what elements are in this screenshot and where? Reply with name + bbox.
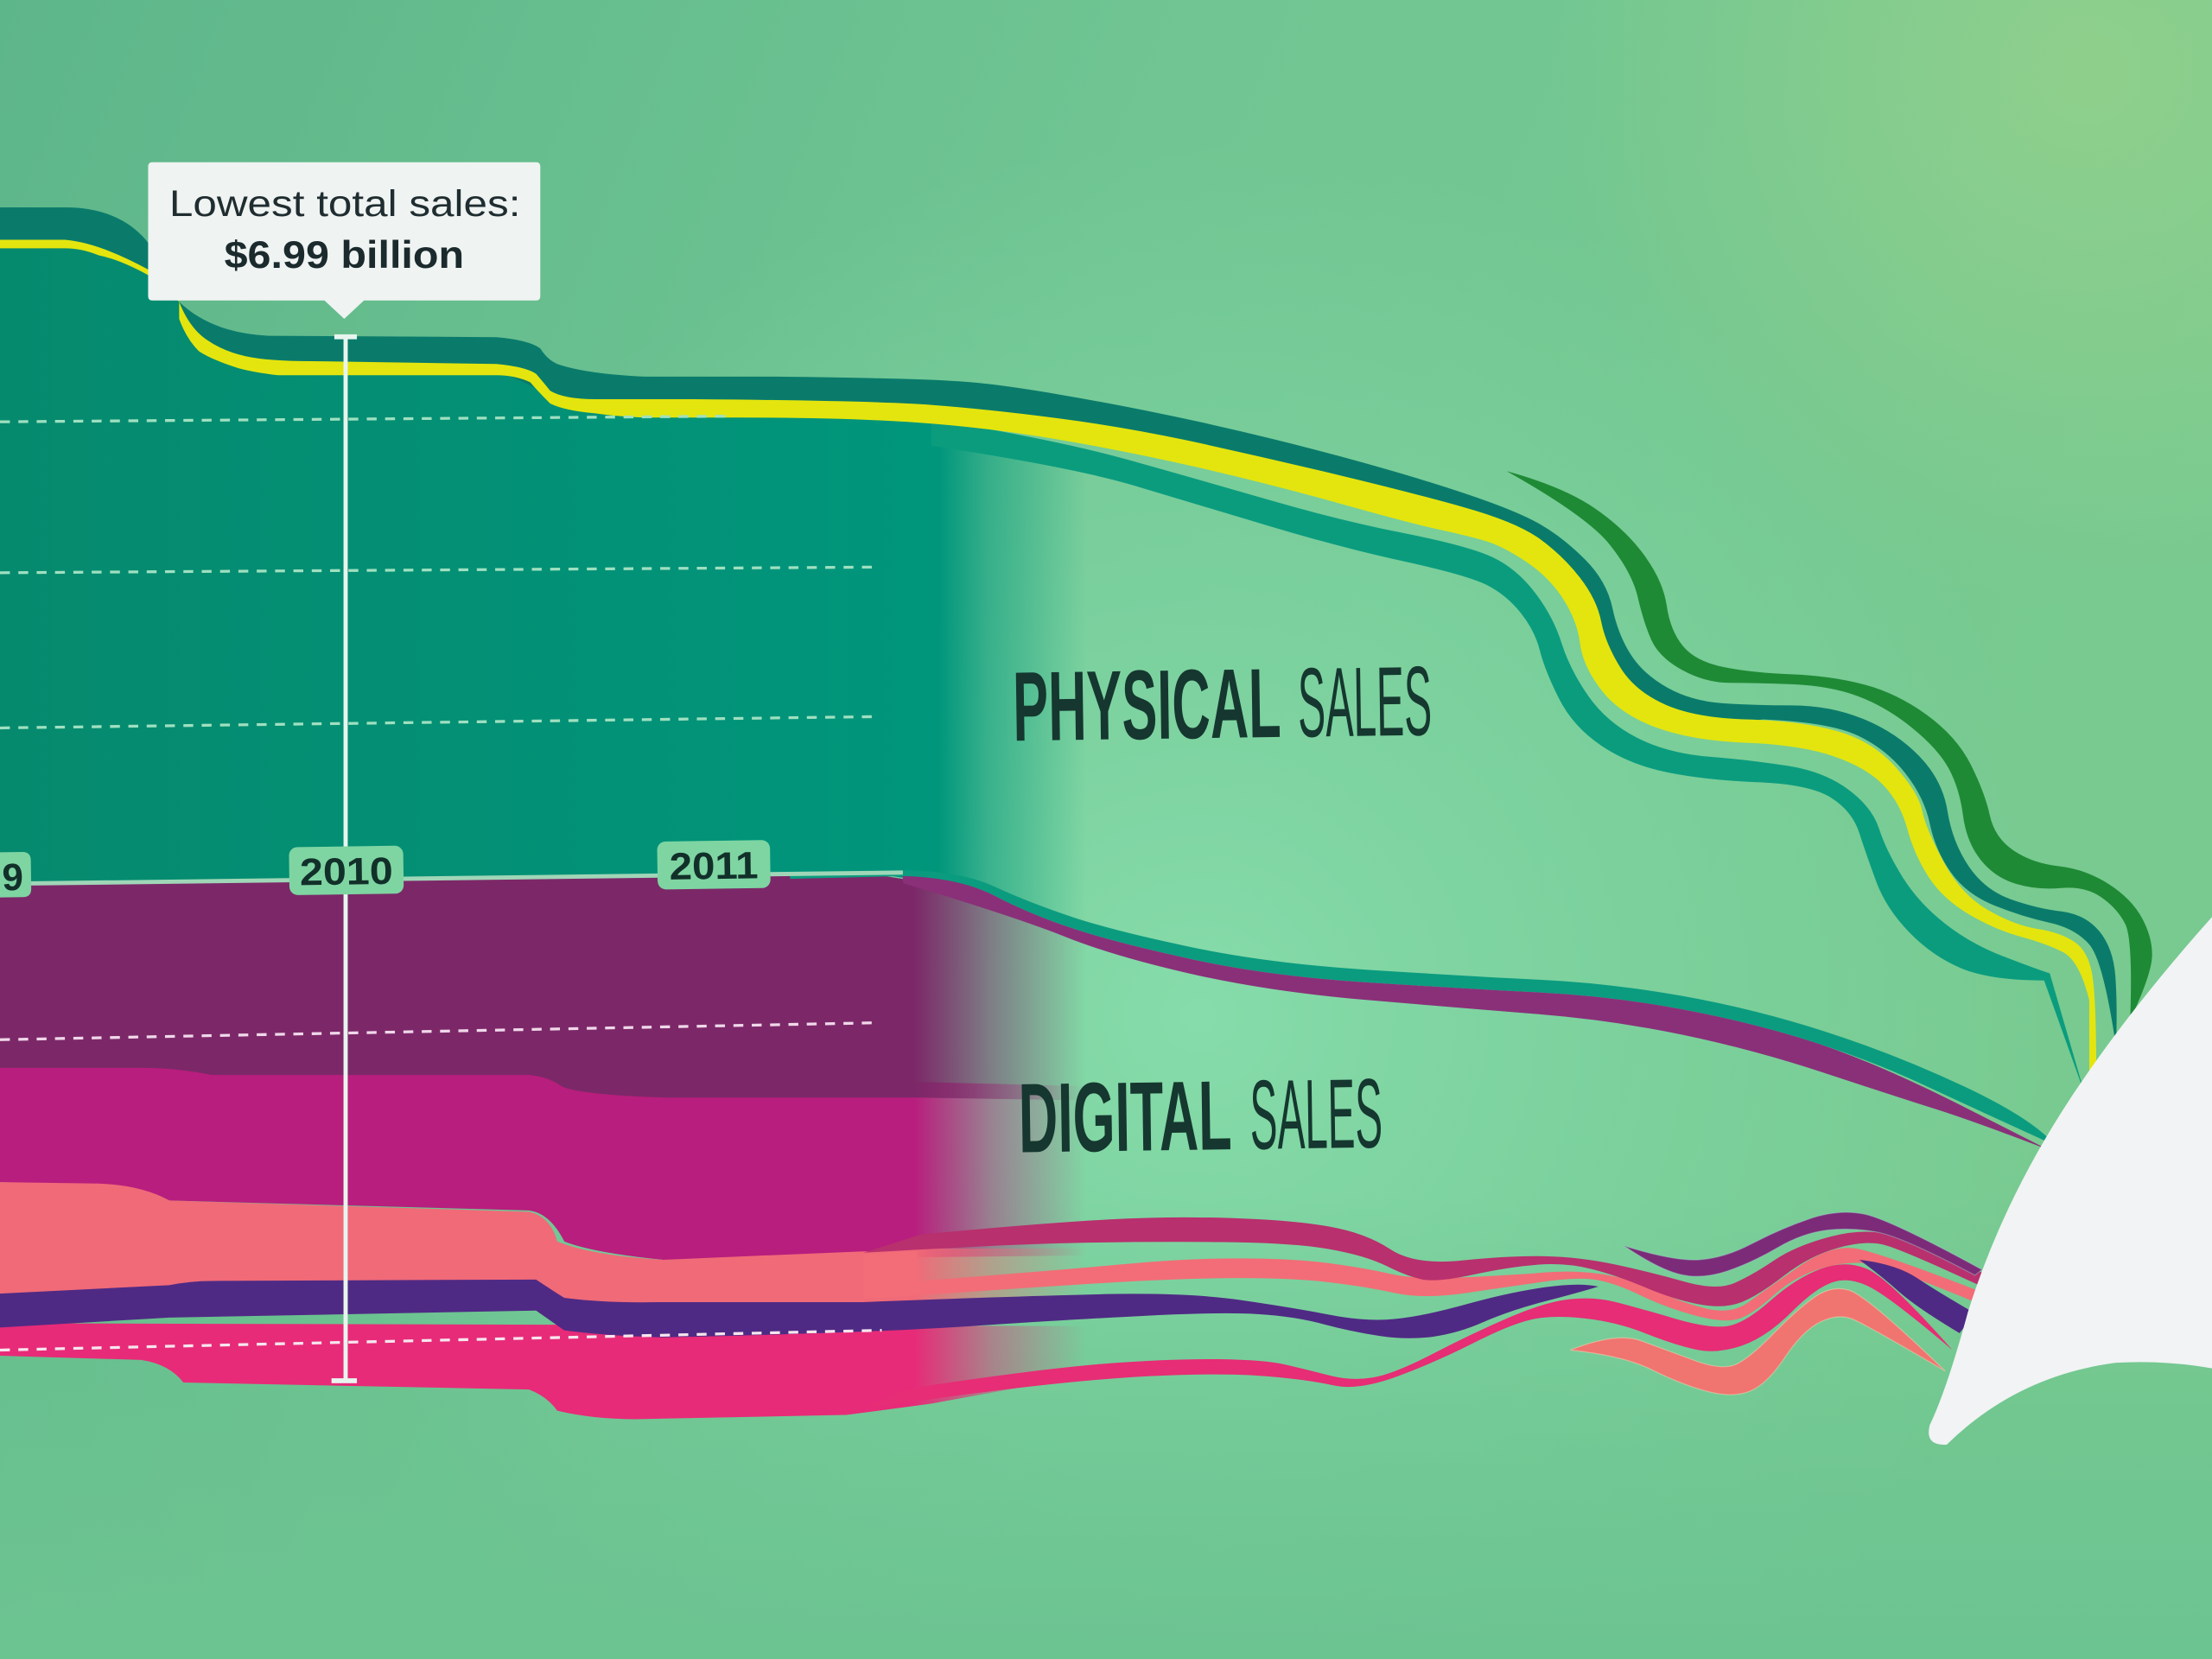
- purple band: [0, 874, 1086, 1100]
- ribbon: dark teal: [0, 207, 2117, 1046]
- panel: digital sales stream: [0, 874, 1982, 1419]
- callout: lowest total sales: $6.99 billion: [225, 234, 464, 276]
- ribbon: crimson: [863, 1217, 1982, 1306]
- ribbon: pink: [863, 1264, 1953, 1408]
- boundary ribbon: physical edge: [790, 870, 2056, 1146]
- ribbon: indigo: [0, 1280, 1599, 1338]
- marker line at lowest total sales: [332, 334, 357, 1383]
- physical sales main area: [0, 243, 1086, 931]
- callout: lowest total sales: [148, 162, 540, 319]
- ribbon: small indigo: [1859, 1260, 1975, 1333]
- ribbon: yellow: [0, 240, 2096, 1079]
- year label: 2010: 2010: [300, 850, 393, 893]
- ribbon: upper purple: [1624, 1212, 1982, 1276]
- dashed gridlines: [0, 416, 881, 1350]
- white sail shape: [1929, 917, 2212, 1445]
- infographic canvas: SALES: [1249, 1059, 1383, 1171]
- callout: lowest total sales: Lowest total sales:: [169, 183, 520, 224]
- year label: 2011: [657, 840, 771, 889]
- year label: 2009 cropped: [0, 852, 31, 899]
- magenta band: [0, 1058, 1086, 1260]
- heading: digital sales: DIGITAL: [1018, 1061, 1232, 1174]
- salmon band: [0, 1182, 1086, 1305]
- year label: 2009 cropped: 9: [2, 856, 23, 899]
- year label: 2010: [289, 846, 404, 895]
- infographic canvas: SALES: [1297, 646, 1433, 759]
- heading: physical sales: PHYSICAL: [1012, 649, 1281, 762]
- year label: 2011: 2011: [669, 844, 759, 888]
- divider line between physical and digital: [0, 873, 903, 884]
- panel: physical sales stream: [0, 207, 2152, 1095]
- boundary ribbon: digital edge: [903, 876, 2049, 1150]
- ribbon: lower green: [931, 419, 2085, 1095]
- ribbon: dark green: [1507, 471, 2152, 1020]
- ribbon: salmon: [863, 1248, 1982, 1320]
- ribbon: lower salmon: [1570, 1288, 1945, 1395]
- pink band: [0, 1323, 1086, 1419]
